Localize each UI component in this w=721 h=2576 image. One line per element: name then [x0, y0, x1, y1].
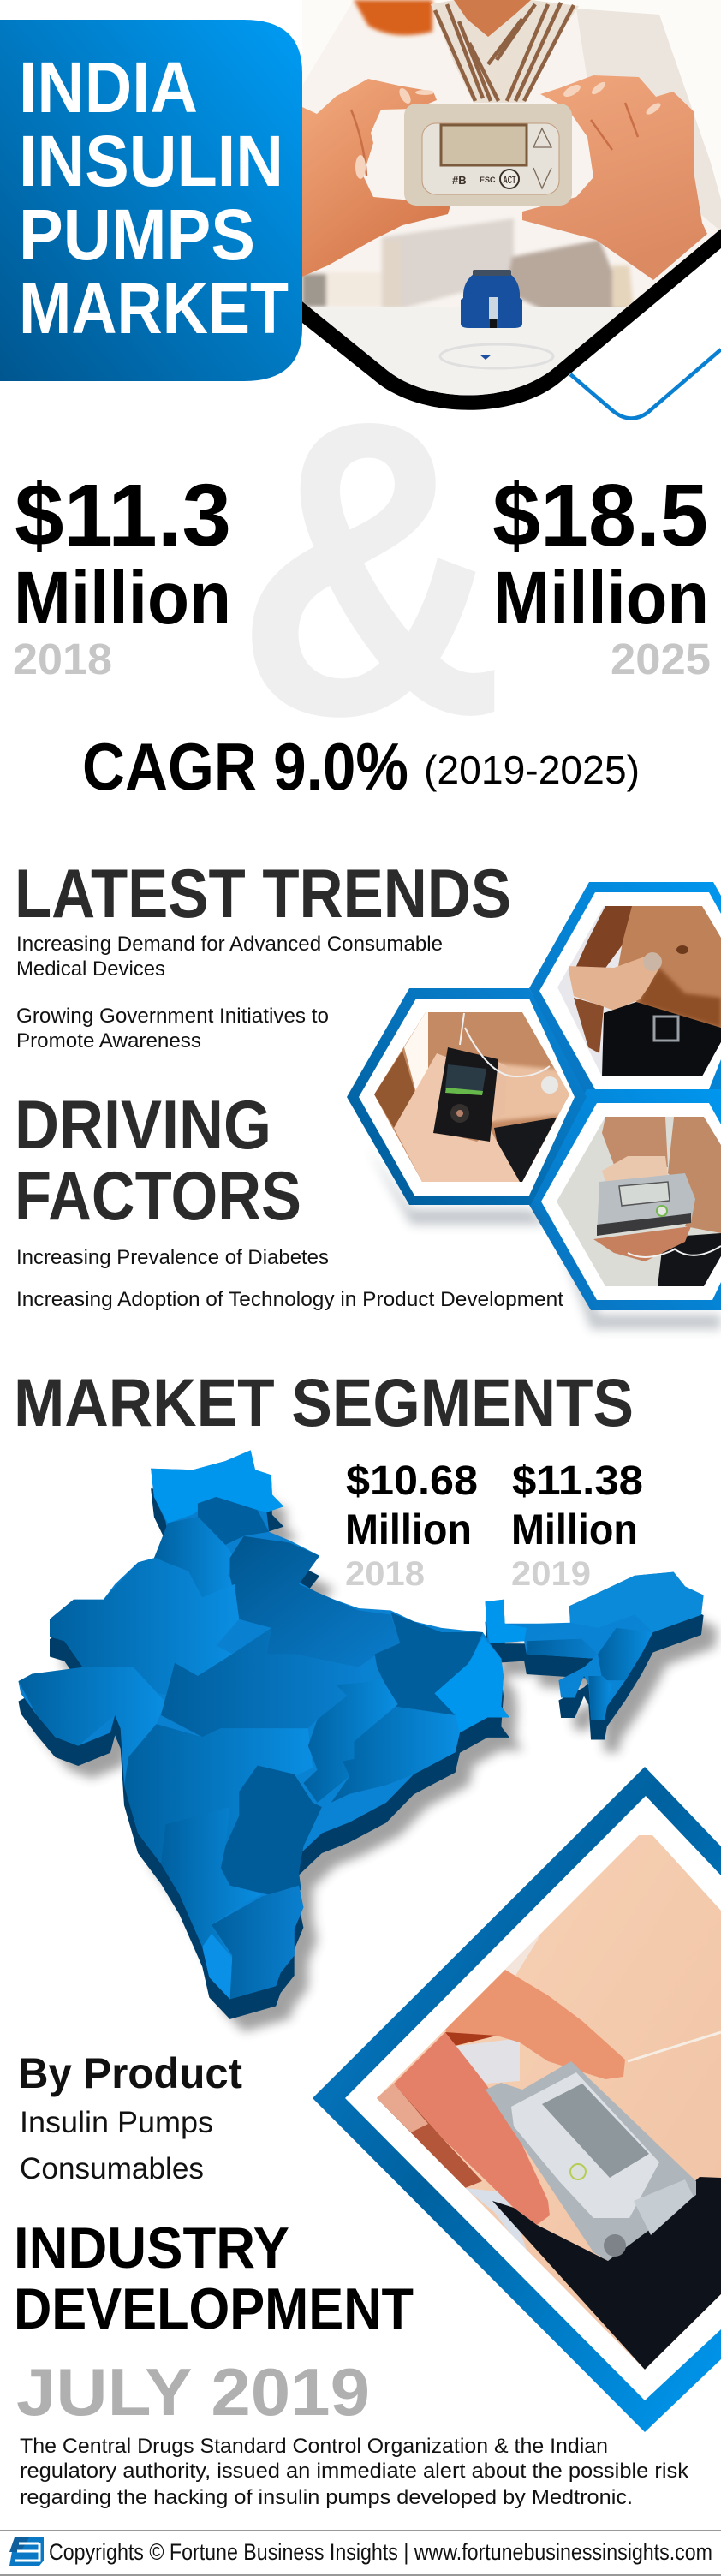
heading: industry development: INDUSTRY	[14, 2215, 289, 2281]
pump device	[404, 104, 572, 206]
shadow	[368, 1148, 548, 1225]
latest trends list	[16, 933, 443, 1052]
coat lower shade	[302, 218, 634, 313]
by product block: Insulin Pumps	[20, 2106, 213, 2139]
neck	[454, 0, 531, 37]
stat: 2025 value: $18.5	[492, 466, 708, 564]
stat: 2018 value	[13, 466, 231, 683]
title text: MARKET	[19, 268, 289, 349]
stat: 2019 segment	[511, 1458, 643, 1593]
pump device: ACT	[504, 174, 516, 186]
lower finger	[377, 2084, 482, 2188]
stat: 2018 segment	[345, 1458, 478, 1593]
date: JULY 2019	[16, 2354, 370, 2430]
footer	[0, 2530, 721, 2576]
latest trends list: Growing Government Initiatives to	[16, 1005, 329, 1028]
right hand	[522, 75, 707, 280]
India 3D map	[18, 1450, 718, 2032]
scarf	[431, 0, 579, 103]
stat: 2018 segment: $10.68	[346, 1458, 478, 1504]
map extrusion	[18, 1470, 704, 2019]
table	[308, 307, 628, 396]
map regions	[18, 1450, 704, 1999]
development paragraph: regulatory authority, issued an immediate alert about the possible risk	[20, 2460, 689, 2483]
CAGR: (2019-2025)	[424, 748, 640, 792]
map shadow	[33, 1483, 718, 2032]
development paragraph: regarding the hacking of insulin pumps developed by Medtronic.	[20, 2486, 633, 2509]
stat: 2018 value: Million	[14, 557, 231, 640]
left hand	[302, 79, 450, 277]
title text: INSULIN	[19, 121, 283, 201]
heading: industry development	[14, 2215, 414, 2341]
stat: 2019 segment: Million	[511, 1506, 638, 1553]
stat: 2025 value	[492, 466, 711, 683]
blue bottle	[461, 270, 522, 328]
fingernails	[355, 80, 662, 179]
black frame	[302, 218, 721, 410]
hair	[354, 0, 432, 35]
title panel	[0, 20, 302, 381]
CAGR	[82, 729, 640, 804]
latest trends list: Medical Devices	[16, 957, 165, 981]
diamond photo frame	[313, 1767, 721, 2432]
hexagon: top right	[529, 882, 721, 1103]
ampersand watermark: &	[235, 333, 506, 802]
heading: driving factors: DRIVING	[15, 1087, 271, 1164]
driving factors list	[16, 1246, 563, 1311]
by product block	[18, 2049, 242, 2185]
pump body	[486, 2061, 696, 2261]
latest trends list: Increasing Demand for Advanced Consumable	[16, 933, 443, 956]
CAGR: CAGR 9.0%	[82, 729, 408, 804]
development paragraph: The Central Drugs Standard Control Organization & the Indian	[20, 2435, 608, 2458]
hexagon: center	[347, 988, 587, 1225]
icon: logo	[9, 2537, 44, 2566]
heading: driving factors: FACTORS	[15, 1158, 301, 1235]
shadow	[557, 1233, 721, 1329]
stat: 2019 segment: 2019	[511, 1555, 591, 1593]
driving factors list: Increasing Prevalence of Diabetes	[16, 1246, 329, 1269]
title text	[19, 47, 289, 349]
tube	[628, 2032, 721, 2061]
pump device: ESC	[480, 176, 496, 184]
title text: INDIA	[19, 47, 198, 128]
title text: PUMPS	[19, 194, 255, 275]
heading: industry development: DEVELOPMENT	[14, 2276, 414, 2341]
index finger	[394, 2032, 550, 2225]
heading: driving factors	[15, 1087, 301, 1235]
stat: 2018 segment: 2018	[345, 1555, 425, 1593]
heading: market segments: MARKET SEGMENTS	[14, 1364, 634, 1440]
tubing	[440, 344, 553, 368]
development paragraph	[20, 2435, 689, 2509]
by product block: Consumables	[20, 2152, 204, 2185]
thin blue frame line	[570, 349, 721, 419]
stat: 2025 value: 2025	[611, 635, 711, 683]
heading: latest trends: LATEST TRENDS	[15, 856, 511, 933]
stat: 2018 value: $11.3	[15, 466, 231, 564]
stat: 2019 segment: $11.38	[512, 1458, 643, 1504]
latest trends list: Promote Awareness	[16, 1029, 201, 1052]
stat: 2018 value: 2018	[13, 635, 112, 683]
header photo frame	[302, 218, 721, 419]
map top surface	[18, 1450, 704, 1999]
driving factors list: Increasing Adoption of Technology in Product Development	[16, 1288, 563, 1311]
jeans	[492, 2177, 721, 2370]
hexagon: bottom right	[529, 1089, 721, 1329]
white coat	[302, 229, 721, 343]
stat: 2018 segment: Million	[345, 1506, 472, 1553]
photo: insulin pump held at waist	[368, 1833, 721, 2372]
upper finger	[445, 1970, 625, 2079]
by product block: By Product	[18, 2049, 242, 2097]
photo: hands holding insulin pump	[302, 0, 721, 411]
pump device: #B	[452, 174, 467, 187]
